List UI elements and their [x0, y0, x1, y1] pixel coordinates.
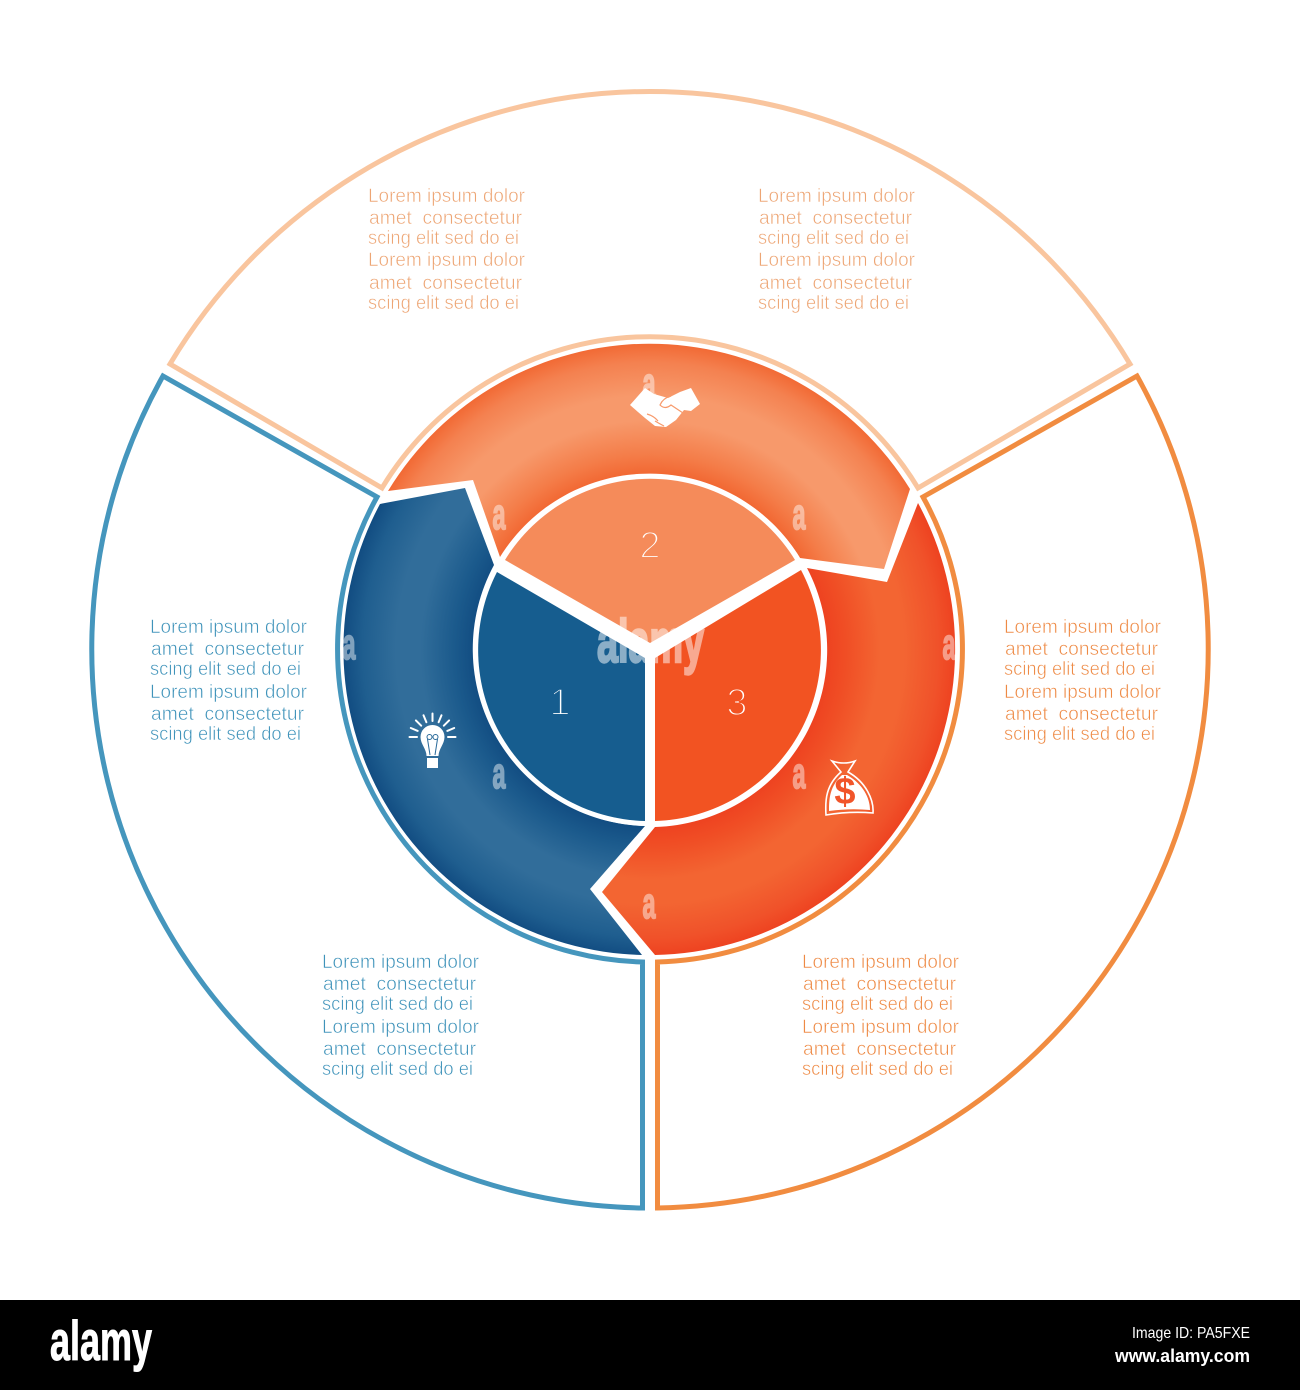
footer bar: www.alamy.com [1114, 1346, 1250, 1366]
text block: lower section 3: Lorem ipsum dolor [802, 952, 960, 973]
watermark: small marks: a [642, 359, 656, 408]
white ring around centre circle [476, 476, 824, 824]
text block: upper section 3: scing elit sed do ei [1004, 659, 1155, 680]
text block: lower section 3: amet consectetur [803, 974, 957, 995]
text block: upper section 1: Lorem ipsum dolor [150, 617, 308, 638]
panel outline: left section 1 [92, 376, 642, 1208]
text block: lower section 1: scing elit sed do ei [322, 994, 473, 1015]
text block: lower section 1: Lorem ipsum dolor [322, 952, 480, 973]
text block: upper section 3: amet consectetur [1005, 704, 1159, 725]
text block: top left of section 2: Lorem ipsum dolor [368, 186, 526, 207]
panel outline: right section 3 [658, 376, 1208, 1208]
watermark: small marks [342, 359, 956, 928]
watermark: small marks: a [342, 620, 356, 669]
text block: top right of section 2: Lorem ipsum dolor [758, 250, 916, 271]
text block: upper section 1: scing elit sed do ei [150, 659, 301, 680]
icon: handshake [630, 388, 700, 427]
text block: top left of section 2: Lorem ipsum dolor [368, 250, 526, 271]
text block: upper section 1: amet consectetur [151, 704, 305, 725]
text block: top right of section 2 [758, 186, 916, 314]
text block: lower section 3: scing elit sed do ei [802, 994, 953, 1015]
number 3: 3 [726, 682, 748, 724]
text block: top right of section 2: Lorem ipsum dolor [758, 186, 916, 207]
text block: lower section 1: scing elit sed do ei [322, 1059, 473, 1080]
footer bar: Image ID: PA5FXE [1132, 1325, 1250, 1342]
text block: top left of section 2 [368, 186, 526, 314]
watermark: small marks: a [492, 490, 506, 539]
number 1: 1 [549, 682, 571, 724]
centre sector 1 [478, 572, 645, 821]
text block: upper section 3: scing elit sed do ei [1004, 724, 1155, 745]
ring arrow segment 2 [388, 344, 910, 569]
footer bar [0, 1300, 1300, 1390]
text block: upper section 1: Lorem ipsum dolor [150, 682, 308, 703]
watermark: small marks: a [642, 879, 656, 928]
watermark: centre logo: alamy [597, 608, 704, 675]
text block: top right of section 2: scing elit sed do ei [758, 228, 909, 249]
number 2: 2 [639, 525, 661, 567]
watermark: small marks: a [792, 490, 806, 539]
icon: money bag: $ [834, 771, 856, 813]
watermark: small marks: a [492, 749, 506, 798]
text block: top right of section 2: amet consectetur [759, 273, 913, 294]
text block: upper section 3: amet consectetur [1005, 639, 1159, 660]
text block: lower section 3: amet consectetur [803, 1039, 957, 1060]
text block: upper section 1: scing elit sed do ei [150, 724, 301, 745]
ring arrow segment 3 [602, 503, 955, 955]
icon: light bulb [410, 714, 456, 768]
text block: lower section 3 [802, 952, 960, 1080]
text block: upper section 1 [150, 617, 308, 745]
ring arrow segment 1 [343, 488, 645, 955]
centre sector 2 [505, 479, 795, 643]
text block: upper section 1: amet consectetur [151, 639, 305, 660]
text block: top left of section 2: amet consectetur [369, 208, 523, 229]
watermark: small marks: a [942, 620, 956, 669]
text block: upper section 3: Lorem ipsum dolor [1004, 682, 1162, 703]
text block: top left of section 2: scing elit sed do ei [368, 228, 519, 249]
icon: money bag [826, 761, 873, 815]
text block: lower section 3: Lorem ipsum dolor [802, 1017, 960, 1038]
text block: top right of section 2: scing elit sed do ei [758, 293, 909, 314]
text block: lower section 3: scing elit sed do ei [802, 1059, 953, 1080]
text block: lower section 1: Lorem ipsum dolor [322, 1017, 480, 1038]
text block: lower section 1: amet consectetur [323, 974, 477, 995]
footer logo: alamy [50, 1309, 152, 1372]
text block: top left of section 2: amet consectetur [369, 273, 523, 294]
text block: lower section 1 [322, 952, 480, 1080]
text block: top right of section 2: amet consectetur [759, 208, 913, 229]
centre sector 3 [655, 570, 821, 821]
text block: lower section 1: amet consectetur [323, 1039, 477, 1060]
text block: upper section 3 [1004, 617, 1162, 745]
text block: upper section 3: Lorem ipsum dolor [1004, 617, 1162, 638]
panel outline: top section 2 [170, 91, 1130, 488]
watermark: small marks: a [792, 749, 806, 798]
text block: top left of section 2: scing elit sed do ei [368, 293, 519, 314]
